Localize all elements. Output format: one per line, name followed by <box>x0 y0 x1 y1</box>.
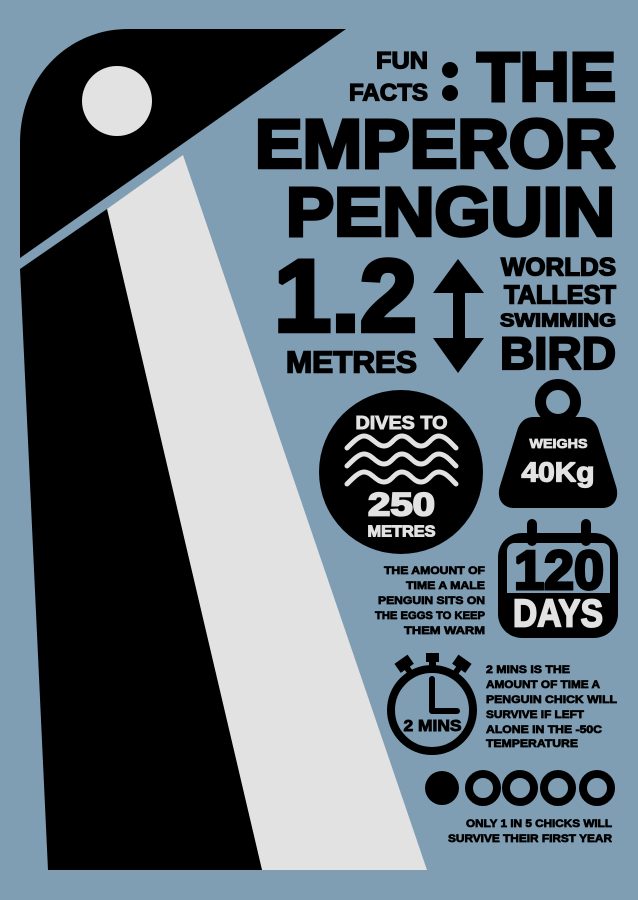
text: male penguin sits on eggs: THEM WARM <box>404 625 485 637</box>
text: chick survival time: PENGUIN CHICK WILL <box>486 694 617 706</box>
height stat <box>274 239 616 380</box>
text: chick survival time: SURVIVE IF LEFT <box>486 709 584 721</box>
dive depth badge <box>319 390 483 554</box>
penguin illustration <box>20 29 427 870</box>
worlds tallest swimming bird: BIRD <box>500 328 616 379</box>
penguin: PENGUIN <box>286 174 615 250</box>
title <box>255 38 616 250</box>
icon: double arrow <box>433 259 484 373</box>
40kg: 40Kg <box>522 456 594 488</box>
weighs: WEIGHS <box>530 436 588 451</box>
penguin eye <box>82 66 152 136</box>
text: chick survival time <box>486 664 617 750</box>
120: 120 <box>514 539 604 601</box>
days: DAYS <box>513 592 603 636</box>
penguin head <box>20 29 346 258</box>
icon: stopwatch <box>391 653 473 751</box>
icon: waves <box>347 436 456 484</box>
250: 250 <box>368 486 435 522</box>
fun facts label: FUN <box>376 48 428 74</box>
text: male penguin sits on eggs <box>375 565 486 637</box>
worlds tallest swimming bird: WORLDS <box>501 254 616 282</box>
fun facts label: FACTS <box>349 80 428 106</box>
text: chick survival time: 2 MINS IS THE <box>486 664 571 676</box>
text: male penguin sits on eggs: THE EGGS TO KEEP <box>375 610 486 622</box>
icon: calendar <box>498 519 618 638</box>
1.2 figure: 1.2 <box>274 239 417 353</box>
emperor: EMPEROR <box>255 106 616 182</box>
text: chick survival time: AMOUNT OF TIME A <box>486 679 600 691</box>
2 mins: 2 MINS <box>404 718 462 735</box>
penguin belly <box>107 155 427 870</box>
text: male penguin sits on eggs: PENGUIN SITS ON <box>378 595 485 607</box>
dives to: DIVES TO <box>356 413 448 433</box>
text: chick survival time: ALONE IN THE -50C <box>486 724 602 736</box>
colon <box>442 62 458 101</box>
metres: METRES <box>368 524 436 540</box>
worlds tallest swimming bird: SWIMMING <box>500 310 616 330</box>
text: male penguin sits on eggs: TIME A MALE <box>406 580 486 592</box>
text: chick survival time: TEMPERATURE <box>486 738 579 750</box>
icon: one in five circles <box>425 771 611 805</box>
metres label: METRES <box>286 344 417 380</box>
text: male penguin sits on eggs: THE AMOUNT OF <box>384 565 485 577</box>
worlds tallest swimming bird <box>500 254 616 379</box>
text: chick survival rate <box>448 818 612 845</box>
worlds tallest swimming bird: TALLEST <box>504 280 616 310</box>
text: chick survival rate: SURVIVE THEIR FIRST YEAR <box>448 833 612 845</box>
penguin back <box>20 209 262 870</box>
fun facts label <box>349 48 428 106</box>
the: THE <box>477 38 616 116</box>
icon: weight <box>499 384 617 508</box>
text: chick survival rate: ONLY 1 IN 5 CHICKS WILL <box>466 818 612 830</box>
